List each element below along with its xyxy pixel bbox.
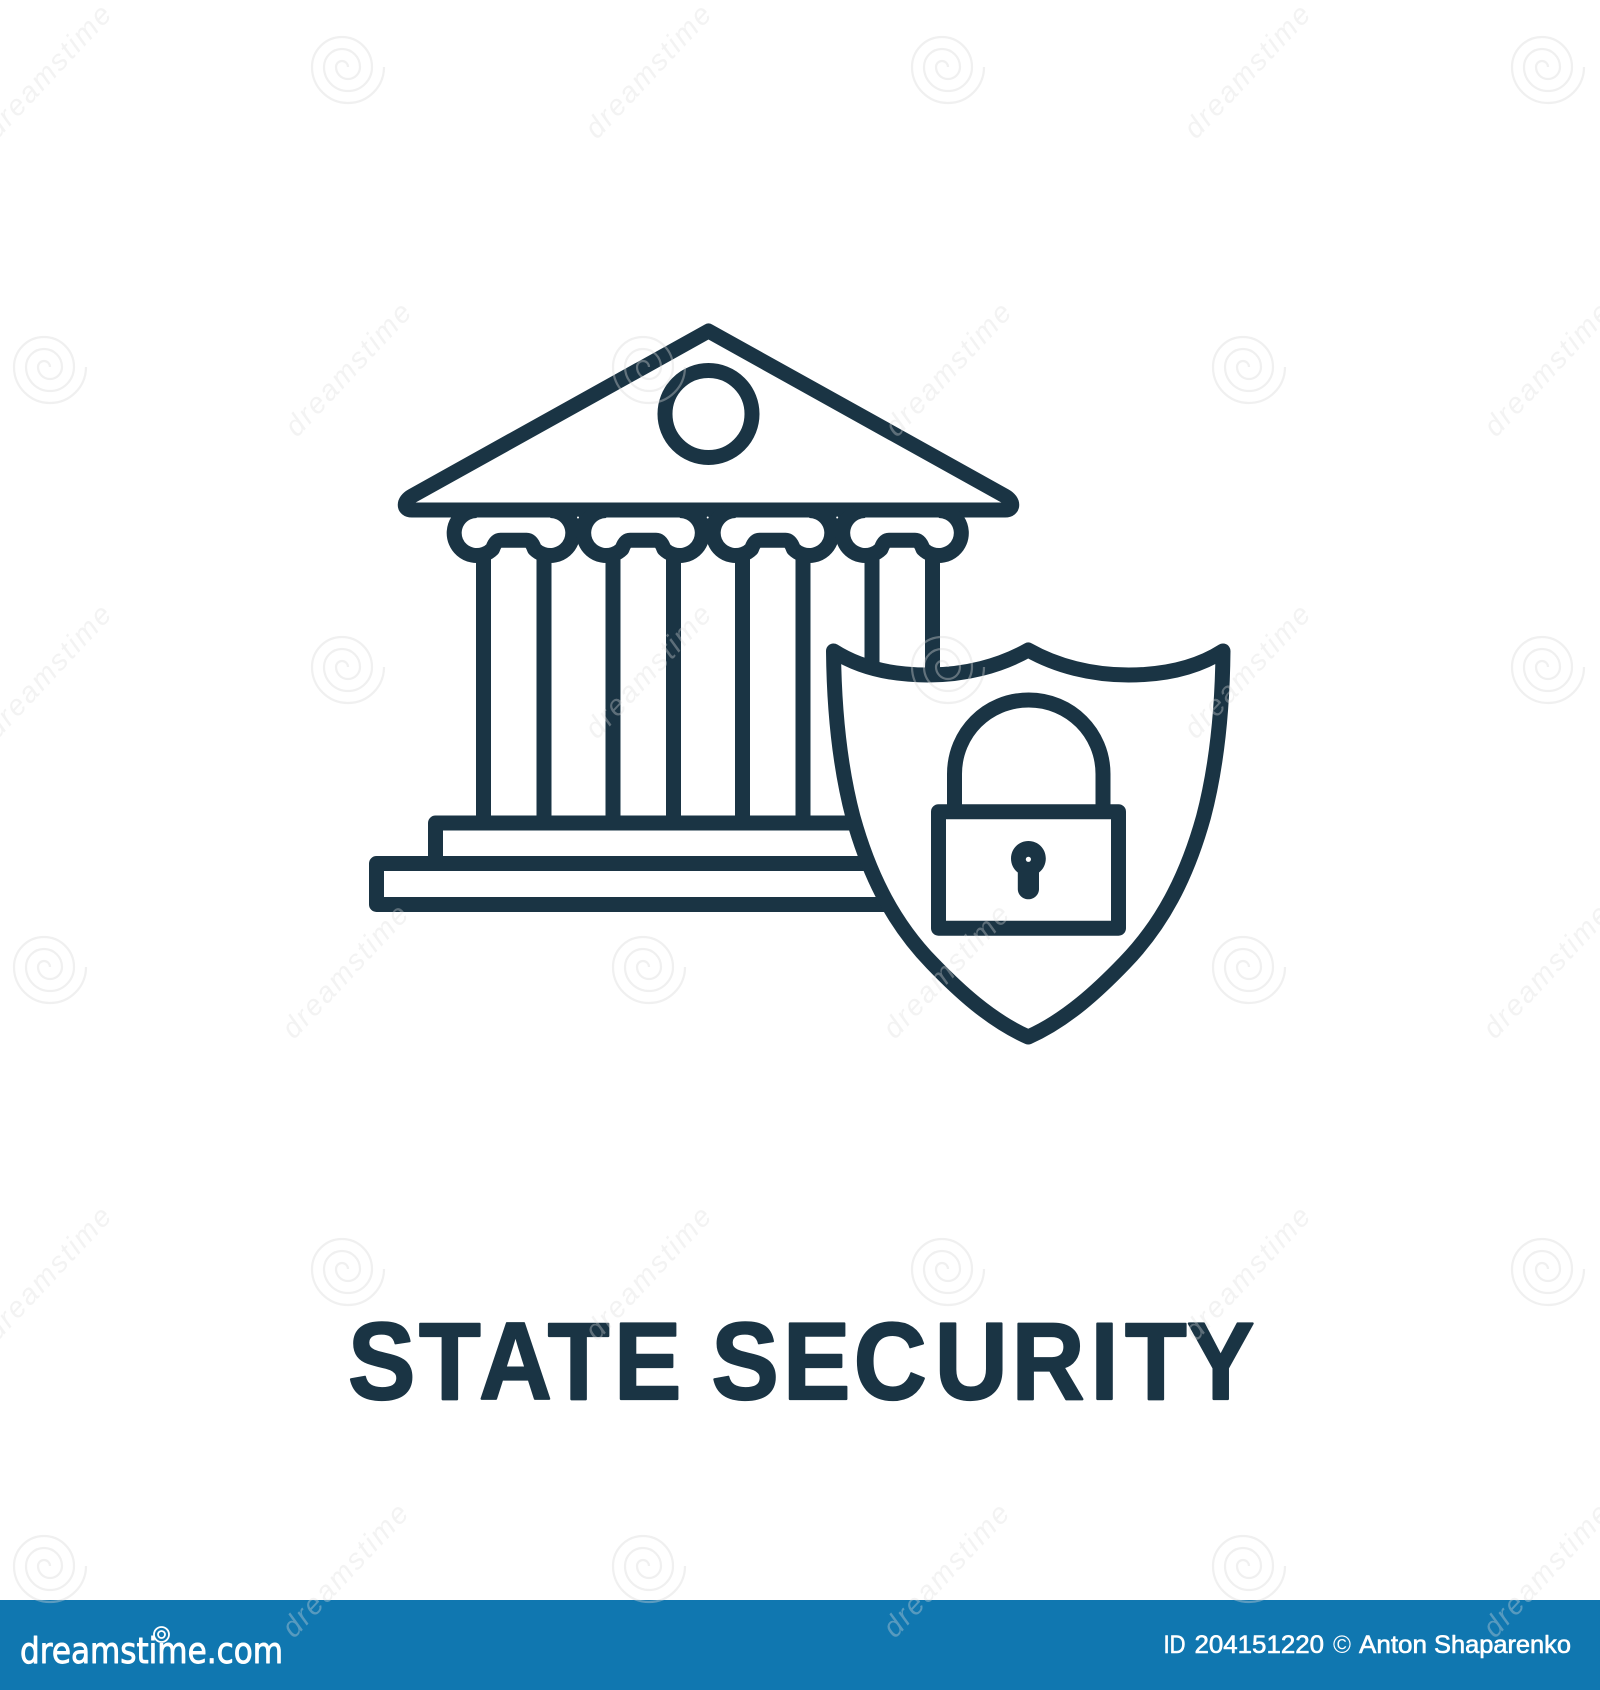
watermark layer: dreamstime — [877, 899, 1016, 1045]
image id and credit: 204151220 — [1194, 1632, 1324, 1659]
icon: pediment roof — [405, 331, 1012, 510]
icon: shield — [834, 650, 1223, 1037]
watermark layer: dreamstime — [877, 1498, 1016, 1644]
watermark layer: dreamstime — [1178, 0, 1317, 145]
image id and credit: Anton — [1359, 1632, 1427, 1659]
image id and credit: © — [1333, 1632, 1351, 1659]
watermark layer: dreamstime — [579, 0, 718, 145]
footer bar — [0, 1600, 1600, 1690]
watermark layer: dreamstime — [1178, 1201, 1317, 1347]
image id and credit: ID — [1164, 1632, 1186, 1659]
watermark layer: dreamstime — [579, 599, 718, 745]
watermark layer: dreamstime — [879, 297, 1018, 443]
icon: padlock — [938, 700, 1118, 928]
logo: dreamstime wordmark: dreamstime.com — [20, 1631, 283, 1672]
watermark layer: dreamstime — [1178, 599, 1317, 745]
icon: building steps — [376, 823, 960, 904]
watermark layer: dreamstime — [579, 1201, 718, 1347]
image id and credit: Shaparenko — [1434, 1632, 1571, 1659]
icon: column capitals and shafts — [454, 510, 961, 818]
watermark layer: dreamstime — [279, 297, 418, 443]
title: STATE SECURITY — [348, 1301, 1254, 1423]
icon: roof circle — [665, 370, 752, 458]
icon: logo spiral — [154, 1627, 169, 1642]
icon: keyhole — [1011, 841, 1046, 899]
watermark layer: dreamstime — [276, 899, 415, 1045]
watermark layer: dreamstime — [276, 1498, 415, 1644]
icon: state building with shield and padlock — [376, 331, 1223, 1037]
image id and credit — [1164, 1632, 1571, 1659]
